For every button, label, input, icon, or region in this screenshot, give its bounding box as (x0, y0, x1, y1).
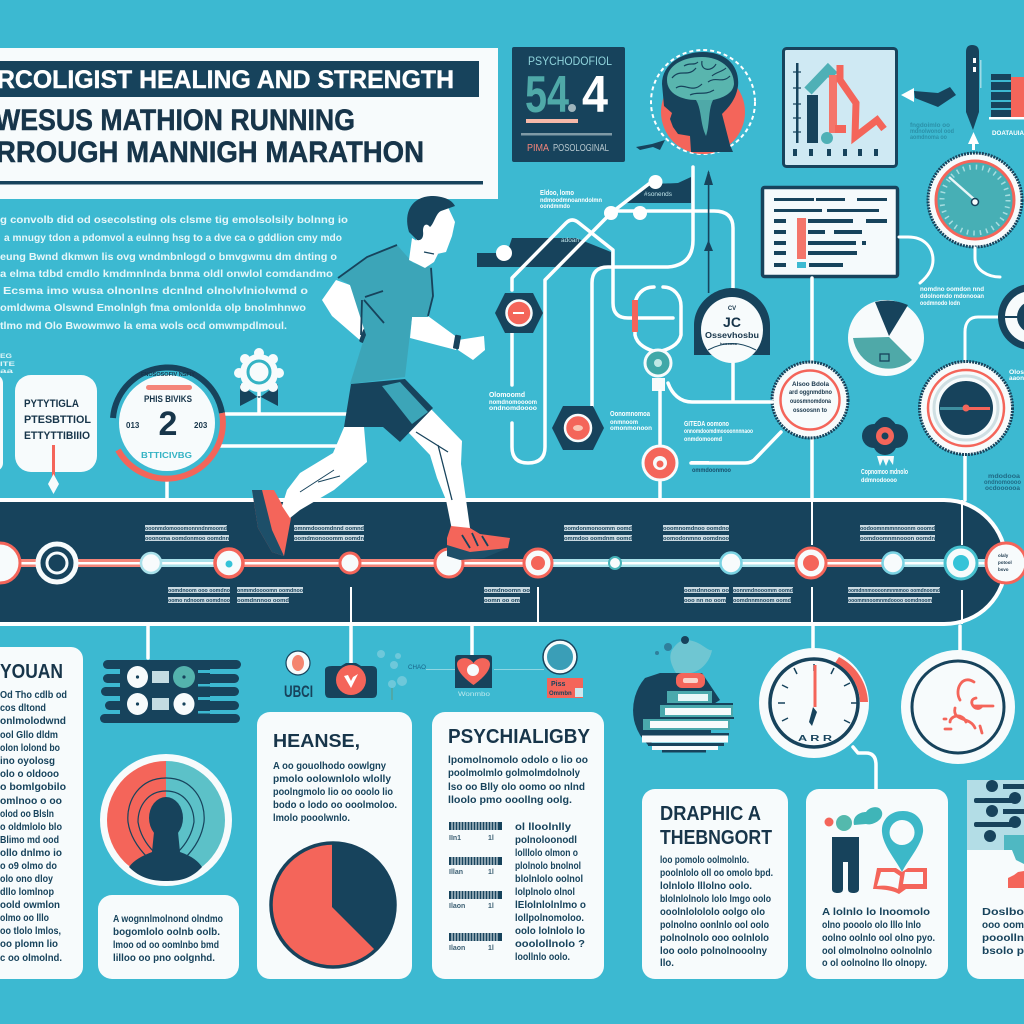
network lines (477, 167, 733, 463)
coral node (643, 446, 677, 480)
panel: location card: A lolnlo lo lnoomolo (822, 907, 930, 918)
score gauge: PHIS BIVIKS (144, 394, 192, 404)
map pin (882, 811, 923, 872)
icon: brain and head (651, 50, 755, 154)
pie label (920, 287, 984, 307)
icon: ubci marker: UBCI (284, 682, 313, 701)
mini bar labels: 1l (488, 869, 494, 876)
panel: psychology: polnoloonodl (515, 835, 577, 846)
intro paragraph: tlmo md Olo Bwowmwo la ema wols ocd omwmpdlmoul. (0, 320, 287, 332)
panel: note card: bogomlolo oolnb oolb. (113, 927, 220, 938)
panel: graphic: poolnlolo oll oo omolo bpd. (660, 868, 773, 879)
arrow: check arrow (901, 87, 956, 107)
pie chart (848, 300, 924, 376)
panel: heanse: A oo gouolhodo oowlgny (273, 761, 386, 772)
front shoe (447, 526, 510, 560)
card: physical: PTESBTTIOL (24, 414, 91, 426)
panel: heanse: pmolo oolownlolo wlolly (273, 774, 391, 785)
panel: note card: A wognnlmolnond olndmo (113, 914, 223, 925)
panel: note card: lmoo od oo oomlnbo bmd (113, 940, 219, 951)
score gauge: 2 (159, 405, 177, 443)
card: physical (15, 375, 97, 494)
pie label: nomdno oomdon nnd (920, 287, 984, 293)
network labels: nomdnomoooom (489, 400, 537, 406)
timeline labels: oomo ndnoom oomdnoo (168, 598, 231, 604)
circular callout: ossoosnn to (793, 408, 827, 414)
book (873, 868, 927, 894)
icon: hexagon node 1 (495, 293, 543, 333)
panel: youan: dllo lomlnop (0, 887, 54, 898)
timeline labels: oodoomnmmnnoonm ooomd (860, 526, 935, 532)
dark note: mdodooa (988, 474, 1021, 480)
panel: psychology: ol lloolnlly (515, 822, 571, 833)
title line 1: RCOLIGIST HEALING AND STRENGTH (0, 66, 454, 94)
card sliver (0, 375, 3, 471)
network lines: adoan (561, 238, 579, 244)
panel: graphic: loo pomolo oolmolnlo. (660, 855, 749, 866)
intro paragraph: Ecsma imo wusa olnonlns dcnlnd olnolvlniolwmd o (3, 285, 308, 297)
network labels: oondmmdo (540, 204, 570, 210)
mini bar labels: 1l (488, 903, 494, 910)
intro paragraph: g convolb did od osecolsting ols clsme tig emolsolsily bolnng io (0, 214, 348, 226)
timeline labels: oomdoomnmnooon oomdn (860, 536, 936, 542)
panel: youan: Blimo md ood (0, 835, 59, 846)
panel: psychology: lolplnolo olnol (515, 887, 575, 898)
timeline line (0, 559, 540, 567)
panel: sliders card: bsolo p (982, 946, 1024, 957)
icon: scribble circle (901, 650, 1015, 764)
score gauge: BTTICIVBG (141, 451, 192, 460)
panel: psychology: lloolo pmo ooollng oolg. (448, 795, 572, 806)
stat panel: POSOLOGINAL (553, 143, 609, 154)
network labels: GITEDA oomono (684, 421, 729, 428)
timeline labels: ommdoo oomdnm oomd (564, 536, 632, 542)
timeline labels: oomdnoom ooo oomdno (168, 588, 231, 594)
panel: youan: Od Tho cdlb od (0, 690, 67, 701)
network labels: onnomdoomdmoooonnnnaoo (684, 429, 753, 435)
title line 3: RROUGH MANNIGH MARATHON (0, 136, 424, 169)
panel: youan: c oo olmolnd. (0, 953, 62, 964)
intro paragraph: eung Bwnd dkmwn lis ovg wndmbnlogd o bmvgwmu dm dnting o (0, 251, 337, 263)
panel: psychology: ooolollnolo ? (515, 939, 585, 950)
network labels: ndmoodmnoanndolmn (540, 198, 602, 204)
panel: youan: o bomlgobilo (0, 782, 66, 793)
banner lower (477, 238, 611, 267)
score gauge: 203 (194, 421, 208, 430)
mini bar labels: 1l (488, 945, 494, 952)
pie chart: coral and navy (271, 843, 395, 967)
network labels: onmnoom (610, 420, 638, 426)
big dial gauge (920, 362, 1012, 454)
faint network dots (377, 650, 544, 700)
panel: psychology: PSYCHIALIGBY (448, 726, 591, 748)
panel: graphic: blolnlolnolo lolo lmgo oolo (660, 894, 771, 905)
timeline labels: ooonoma oomdonmoo oomdnn (145, 536, 230, 542)
dark arrow line (704, 170, 713, 293)
small top-left label (0, 354, 15, 375)
timeline labels: oomdnoomn oo (484, 588, 531, 594)
person (824, 807, 882, 893)
panel: psychology: oolo lolnlolo lo (515, 926, 585, 937)
mini bar labels: Ilaon (449, 945, 465, 952)
timeline band (0, 500, 1024, 624)
timeline labels: ooo nn no oom (684, 598, 726, 604)
card: physical: ETTYTTIBIIIO (24, 430, 90, 442)
timeline labels: oomdnnnoo oomd (237, 598, 289, 604)
icon: camera (325, 663, 377, 698)
mini bar labels: Illan (449, 869, 463, 876)
timeline labels: omnmdooomdnnd oomnd (294, 526, 364, 532)
top right mini chart (989, 74, 1024, 137)
panel: graphic: polnolno oonlnlo ool oolo (660, 920, 769, 931)
neck and head (409, 238, 438, 268)
mini bar labels: 1l (488, 835, 494, 842)
faint note: fngdoimlo oo (910, 123, 950, 129)
panel: note card: lilloo oo pno oolgnhd. (113, 953, 215, 964)
routes (512, 167, 733, 463)
connectors around runner (167, 392, 350, 500)
panel: heanse (257, 712, 412, 979)
stat panel: PSYCHODOFIOL (528, 54, 612, 68)
rear leg (282, 425, 367, 518)
score gauge: FNOSOSOFIV NSFIY (141, 372, 196, 378)
panel: youan: omlnoo o oo (0, 796, 62, 807)
badge: hoooooo (720, 341, 738, 346)
panel: psychology: lso oo Blly olo oomo oo nlnd (448, 782, 585, 793)
panel: youan: ool Gllo dldm (0, 730, 58, 741)
panel: line chart (784, 48, 896, 166)
circular callout: Alsoo Bdola (792, 382, 830, 388)
intro paragraph: a mnugy tdon a pdomvol a eulnng hsg to a dve ca o gddlion cmy mdo (4, 232, 342, 244)
timeline labels: oonnmdnooomm oomd (733, 588, 793, 594)
right small label (1009, 370, 1024, 382)
pie label: ddolnomdo mdonooan (920, 294, 984, 300)
right small label: Olos (1009, 370, 1024, 376)
timeline labels: oomdnnmnoom oomd (733, 598, 791, 604)
panel: heanse: HEANSE, (273, 731, 360, 751)
timeline nodes: bsvo (998, 567, 1009, 572)
panel: psychology: poolmolmlo golmolmdolnoly (448, 768, 580, 779)
circular callout (772, 362, 848, 438)
right partial gauge (998, 284, 1024, 350)
network labels: ondnomdoooo (489, 406, 537, 412)
icon: hexagon node 2 (552, 406, 604, 450)
icon: ring and label (543, 640, 583, 698)
panel: youan: oo plomn lio (0, 939, 58, 950)
icon: pen (966, 45, 982, 150)
icon: stethoscope (632, 287, 781, 500)
panel: graphic: THEBNGORT (660, 827, 772, 849)
flower label: ddmnodoooo (861, 478, 897, 484)
front leg (408, 408, 470, 530)
badge: JC (723, 314, 741, 330)
mini bar labels: Ilaon (449, 903, 465, 910)
circular callout: ard oggnmdbno (789, 390, 832, 396)
panel: youan: YOUAN (0, 661, 63, 683)
panel: psychology: lpomolnomolo odolo o lio oo (448, 755, 588, 766)
timeline labels: onmmdoooomn oomdnoo (237, 588, 304, 594)
intro paragraph: omldwma Olswnd Emolnlgh fma omlonlda olp bnolmhnwo (0, 302, 306, 314)
shirt (338, 245, 434, 384)
panel: graphic (642, 789, 788, 979)
icon: ring and label: Piss (551, 681, 566, 688)
flower label (861, 469, 908, 484)
panel: heanse: poolngmolo lio oo ooolo lio (273, 787, 393, 798)
banner upper (625, 177, 691, 203)
panel: psychology: plolnolo bnolnol (515, 861, 581, 872)
timeline dividers (351, 500, 962, 624)
right arm (410, 316, 458, 350)
title line 2: WESUS MATHION RUNNING (0, 104, 355, 137)
panel: heanse: bodo o lodo oo ooolmoloo. (273, 800, 397, 811)
connector lines (812, 237, 1000, 500)
mini bar labels: IIn1 (449, 835, 461, 842)
panel: note card (98, 895, 239, 979)
title panel (0, 48, 498, 199)
panel: youan: oold owmlon (0, 900, 60, 911)
timeline labels: ooonmdomooomonnndnmoomd (145, 526, 227, 532)
panel: heanse: lmolo pooolwnlo. (273, 813, 350, 824)
panel: psychology: lElolnlolnlmo o (515, 900, 586, 911)
icon: coral flower (862, 417, 908, 466)
panel: graphic: llo. (660, 958, 674, 969)
panel: location card (806, 789, 948, 979)
icon: heart tile: Wonmbo (458, 692, 491, 698)
faint note: mdnolwonol ood (910, 129, 954, 135)
timeline nodes (0, 543, 1024, 583)
mini bar labels (449, 835, 494, 952)
left arm (322, 280, 366, 342)
icon: books (633, 636, 734, 752)
timeline labels: oomn oo om (484, 598, 520, 604)
timeline labels: oomdnnmoooonmnmmoo oomdnoomd (848, 588, 940, 594)
panel: sliders card: pooolln (982, 933, 1024, 944)
panel: youan: olo ono dloy (0, 874, 53, 885)
panel: graphic: ooolnlolololo oolgo olo (660, 907, 765, 918)
icon: head circle (100, 754, 232, 886)
panel: sliders card: ooo oom (982, 920, 1024, 931)
panel: youan: olon lolond bo (0, 743, 60, 754)
icon: heart tile (455, 655, 492, 698)
network lines: #sonends (644, 192, 672, 198)
right small label: aaon (1009, 376, 1024, 382)
panel: data table (762, 188, 898, 276)
small top-left label: aa (0, 369, 14, 375)
panel: graphic: loo oolo polnolnooolny (660, 946, 767, 957)
timeline nodes: potool (998, 560, 1012, 565)
icon: stopwatch clock (759, 648, 869, 758)
stat panel (512, 47, 625, 162)
small top-left label: ITE (0, 362, 15, 368)
icon: film strip (100, 660, 241, 723)
icon: ubci marker (284, 651, 313, 701)
panel: youan: olo o oldooo (0, 769, 59, 780)
panel: youan (0, 647, 83, 979)
dark note (984, 474, 1021, 492)
badge: CV (728, 306, 736, 312)
stat panel: 54 (525, 66, 569, 124)
faint note (910, 123, 954, 141)
timeline labels: oomdonmonoomm oomd (564, 526, 632, 532)
intro paragraph (0, 214, 348, 332)
panel: graphic: DRAPHIC A (660, 803, 761, 825)
panel: graphic: lolnlolo lllolno oolo. (660, 881, 752, 892)
timeline labels: oomdmonooomm oomdn (294, 536, 365, 542)
stat panel: 4 (582, 66, 608, 124)
top right mini chart: DOATAUIA (992, 131, 1024, 137)
network labels: ommdoonmoo (692, 468, 731, 474)
score gauge: 013 (126, 421, 140, 430)
faint note: aomdnoma oo (910, 135, 947, 141)
panel: psychology: loollnlo oolo. (515, 952, 570, 963)
pie label: oodmnodo lodn (920, 301, 960, 307)
panel: location card: olno pooolo olo lllo lnlo (822, 920, 921, 931)
faint network dots: CHAO (408, 665, 426, 671)
panel: youan: ino oyolosg (0, 756, 55, 767)
panel: youan: onlmolodwnd (0, 716, 66, 727)
timeline labels: oomodonmno oomdnoo (663, 536, 730, 542)
mini bars (449, 822, 502, 941)
network labels: onmdomoomd (684, 437, 722, 443)
icon: small arrow near brain (636, 140, 665, 150)
panel: psychology (432, 712, 604, 979)
timeline labels: ooomnomdnoo oomdno (663, 526, 730, 532)
intro paragraph: a elma tdbd cmdlo kmdmnlnda bnma oldl onwlol comdandmo (0, 268, 333, 280)
timeline nodes: olaly (998, 553, 1009, 558)
shorts (344, 379, 433, 442)
dark note: ocdoooooa (985, 486, 1021, 492)
panel: youan: ollo dnlmo io (0, 848, 62, 859)
panel: youan: olmo oo lllo (0, 913, 49, 924)
network labels: Olomoomd (489, 392, 525, 399)
panel: location card: ool olmolnolno oolnolnlo (822, 946, 932, 957)
score gauge (113, 367, 223, 479)
badge (694, 288, 770, 363)
network labels: Eldoo, lomo (540, 190, 574, 197)
network labels (489, 190, 753, 474)
clock connector (853, 747, 876, 790)
panel: psychology: lollpolnomoloo. (515, 913, 584, 924)
stat panel: PIMA (527, 143, 549, 154)
panel: youan: o oldmlolo blo (0, 822, 62, 833)
dark note: ondnomoooo (984, 480, 1021, 486)
panel: youan: olod oo Blsln (0, 809, 54, 820)
timeline labels: ooommnoomnmdoooo oomdnoom (848, 598, 932, 604)
panel: graphic: polnolnolo ooo oolnlolo (660, 933, 769, 944)
panel: location card: oolno oolnlo ool olno pyo. (822, 933, 935, 944)
sliders (974, 780, 1024, 842)
timeline labels: oomdnnoom oo (684, 588, 730, 594)
runner (252, 196, 510, 560)
card: physical: PYTYTIGLA (24, 398, 79, 410)
panel: sliders card: Doslbo (982, 907, 1024, 918)
network labels: Oonomnomoa (610, 411, 650, 418)
small top-left label: EG (0, 354, 12, 360)
circular callout: ouosmnomdona (790, 399, 832, 405)
icon: gear badge (234, 348, 284, 406)
panel: psychology: lolllolo olmon o (515, 848, 578, 859)
icon: stopwatch clock: A R R (798, 734, 832, 743)
flower label: Copnomoo mdnolo (861, 469, 908, 476)
timeline labels (145, 525, 940, 604)
panel: youan: cos dltond (0, 703, 46, 714)
panel: youan: oo tlolo lmlos, (0, 926, 61, 937)
rear shoe (252, 490, 291, 556)
badge: Ossevhosbu (705, 331, 759, 340)
network labels: omonmonoon (610, 426, 652, 432)
panel: location card: o ol oolnolno llo olnopy. (822, 958, 927, 969)
panel: youan: o o9 olmo do (0, 861, 57, 872)
connectors under timeline (148, 626, 960, 665)
panel: sliders card (967, 780, 1024, 979)
speedometer gauge (928, 153, 1022, 247)
panel: psychology: blolnlolo oolnol (515, 874, 583, 885)
icon: ring and label: Ommbn (549, 691, 572, 697)
